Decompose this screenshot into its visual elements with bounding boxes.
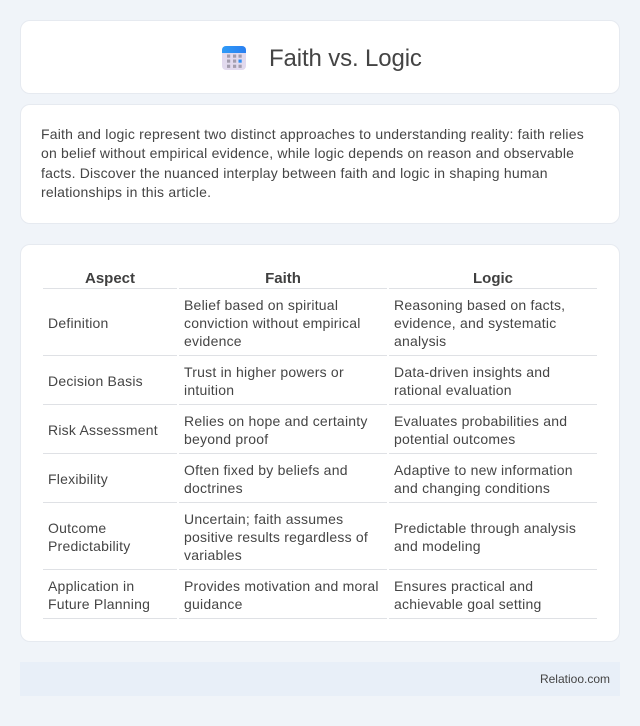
footer credit: Relatioo.com (540, 672, 610, 686)
table header: Faith (265, 270, 301, 287)
panel: introduction (20, 104, 620, 224)
row: Decision Basis: Decision Basis (48, 373, 143, 389)
row: Risk Assessment: Relies on hope and certainty beyond proof (184, 413, 368, 447)
row: Flexibility: Flexibility (48, 471, 108, 487)
table header: Logic (473, 270, 513, 287)
row: Application in Future Planning: Provides motivation and moral guidance (184, 578, 379, 612)
table header (43, 270, 597, 289)
panel: title header (20, 20, 620, 94)
icon: calendar (222, 46, 246, 70)
row: Risk Assessment: Risk Assessment (48, 422, 158, 438)
row: Decision Basis: Data-driven insights and rational evaluation (394, 364, 550, 398)
footer bar (20, 662, 620, 696)
row: Definition: Belief based on spiritual conviction without empirical evidence (184, 297, 361, 349)
row: Application in Future Planning: Application in Future Planning (48, 578, 150, 612)
row: Flexibility: Adaptive to new information and changing conditions (394, 462, 573, 496)
row: Decision Basis: Trust in higher powers or intuition (184, 364, 344, 398)
row: Decision Basis (43, 364, 597, 405)
row: Flexibility: Often fixed by beliefs and doctrines (184, 462, 348, 496)
row: Definition (43, 297, 597, 356)
row: Definition: Definition (48, 315, 109, 331)
row: Application in Future Planning: Ensures practical and achievable goal setting (394, 578, 542, 612)
row: Outcome Predictability: Outcome Predictability (48, 520, 130, 554)
row: Outcome Predictability: Uncertain; faith assumes positive results regardless of variables (184, 511, 368, 563)
row: Outcome Predictability: Predictable through analysis and modeling (394, 520, 576, 554)
row: Flexibility (43, 462, 597, 503)
row: Definition: Reasoning based on facts, evidence, and systematic analysis (394, 297, 565, 349)
row: Risk Assessment: Evaluates probabilities and potential outcomes (394, 413, 567, 447)
panel: comparison table (20, 244, 620, 642)
row: Application in Future Planning (43, 578, 597, 619)
title: Faith vs. Logic (269, 45, 422, 72)
row: Risk Assessment (43, 413, 597, 454)
table header: Aspect (85, 270, 135, 287)
row: Outcome Predictability (43, 511, 597, 570)
intro text: Faith and logic represent two distinct approaches to understanding reality: faith relies on belief without empirical evidence, while logic depends on reason and observable facts. Discover the nuanced interplay between faith and logic in shaping human relationships in this article. (41, 126, 584, 200)
